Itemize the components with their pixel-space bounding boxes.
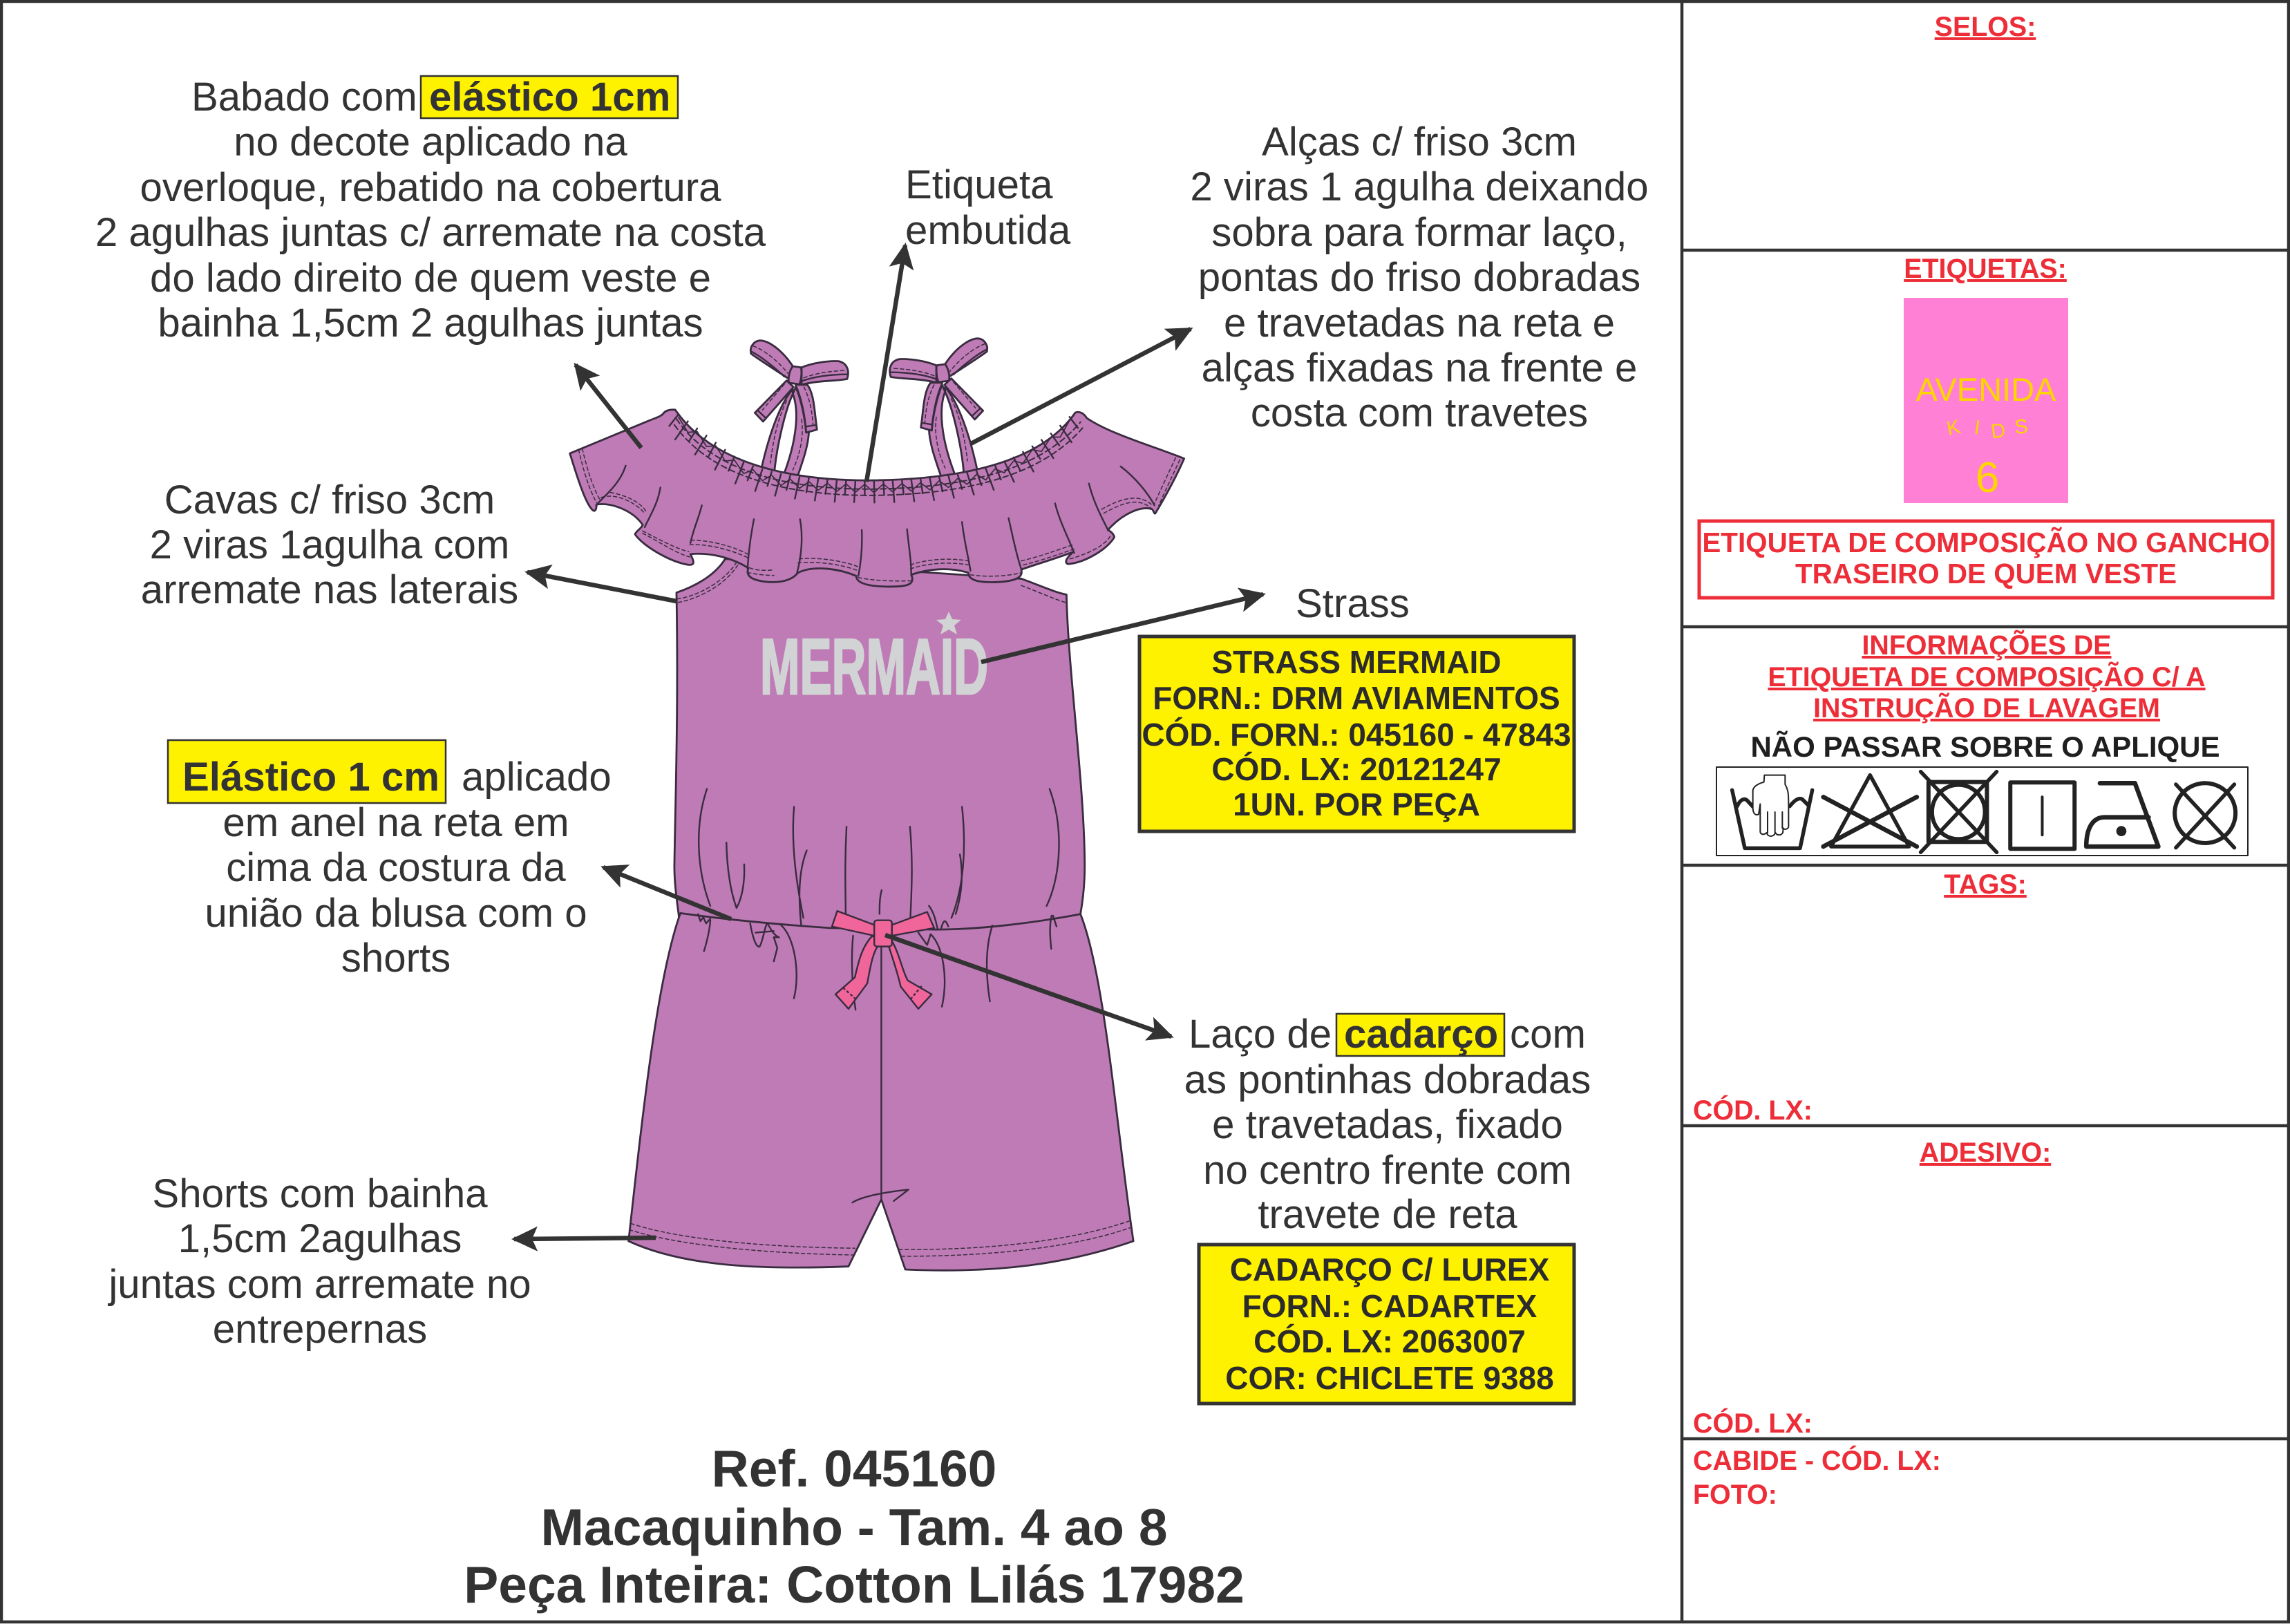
- brand label: [1904, 298, 2068, 503]
- arrow: laço: [885, 935, 1171, 1037]
- arrow: shorts: [514, 1238, 656, 1239]
- note: laço: Laço de: [1189, 1012, 1332, 1057]
- note: elástico: Elástico 1 cm: [182, 755, 439, 800]
- note: alças: pontas do friso dobradas: [1198, 255, 1640, 300]
- heading: tags: TAGS:: [1944, 869, 2027, 900]
- note: alças: alças fixadas na frente e: [1202, 346, 1637, 390]
- brand label: 6: [1976, 454, 1999, 502]
- hanger and photo: FOTO:: [1693, 1480, 1777, 1510]
- note: strass: Strass: [1296, 581, 1410, 626]
- title: Peça Inteira: Cotton Lilás 17982: [464, 1556, 1245, 1614]
- note: etiqueta embutida: Etiqueta: [905, 162, 1053, 207]
- note: babado: overloque, rebatido na cobertura: [140, 165, 721, 210]
- note: babado: no decote aplicado na: [234, 120, 627, 164]
- heading: etiquetas: ETIQUETAS:: [1904, 254, 2067, 284]
- note: laço: com: [1510, 1012, 1586, 1057]
- icon: no tumble dry: [1921, 772, 1996, 852]
- note: babado: do lado direito de quem veste e: [150, 256, 711, 301]
- warning: NÃO PASSAR SOBRE O APLIQUE: [1750, 730, 2220, 763]
- icon: iron low: [2086, 783, 2158, 847]
- note: babado: 2 agulhas juntas c/ arremate na costa: [95, 210, 766, 255]
- wash care icons: [1716, 767, 2248, 856]
- composition label note: ETIQUETA DE COMPOSIÇÃO NO GANCHO: [1702, 527, 2270, 558]
- left strap bow: [750, 341, 848, 482]
- heading: selos: SELOS:: [1935, 12, 2036, 42]
- brand label: AVENIDA: [1916, 371, 2056, 408]
- note: shorts: [107, 1171, 531, 1352]
- note: shorts: entrepernas: [213, 1307, 427, 1352]
- arrow: etiqueta embutida: [867, 245, 905, 482]
- box: cadarço: COR: CHICLETE 9388: [1225, 1360, 1554, 1396]
- box: cadarço: [1199, 1245, 1574, 1404]
- brand label: I: [1973, 417, 1981, 439]
- note: cavas: Cavas c/ friso 3cm: [164, 478, 495, 522]
- title: Ref. 045160: [712, 1439, 996, 1498]
- hanger and photo: CABIDE - CÓD. LX:: [1693, 1446, 1941, 1476]
- box: strass mermaid: [1139, 636, 1574, 831]
- shorts: [629, 906, 1133, 1270]
- note: cavas: 2 viras 1agulha com: [150, 522, 509, 567]
- note: alças: 2 viras 1 agulha deixando: [1190, 164, 1649, 209]
- note: alças: [1190, 120, 1649, 435]
- heading: informações: INFORMAÇÕES DE: [1862, 630, 2112, 661]
- tag code: CÓD. LX:: [1693, 1095, 1813, 1126]
- title: [464, 1439, 1245, 1614]
- arrow: strass: [981, 594, 1263, 662]
- hanger and photo: [1693, 1446, 1941, 1510]
- box: strass mermaid: FORN.: DRM AVIAMENTOS: [1153, 680, 1560, 716]
- waist drawstring bow: [832, 911, 934, 1009]
- note: alças: costa com travetes: [1251, 390, 1588, 435]
- note: laço: travete de reta: [1258, 1192, 1517, 1237]
- composition label note: [1699, 521, 2273, 598]
- note: alças: Alças c/ friso 3cm: [1262, 120, 1577, 164]
- note: elástico: aplicado: [462, 755, 612, 800]
- note: babado: bainha 1,5cm 2 agulhas juntas: [158, 301, 703, 346]
- note: cavas: [141, 478, 518, 612]
- right strap bow: [890, 339, 987, 480]
- note: cavas: arremate nas laterais: [141, 567, 518, 612]
- note: babado: [95, 75, 766, 346]
- note: elástico: em anel na reta em: [223, 800, 569, 845]
- note: elástico: [168, 740, 612, 981]
- note: shorts: 1,5cm 2agulhas: [178, 1216, 462, 1261]
- note: alças: sobra para formar laço,: [1211, 210, 1627, 255]
- box: strass mermaid: 1UN. POR PEÇA: [1233, 786, 1480, 822]
- note: laço: cadarço: [1344, 1012, 1498, 1057]
- arrow: alças: [971, 329, 1191, 444]
- note: elástico: cima da costura da: [226, 845, 566, 890]
- note: laço: e travetadas, fixado: [1212, 1102, 1563, 1147]
- box: cadarço: FORN.: CADARTEX: [1242, 1288, 1537, 1324]
- note: babado: Babado com: [191, 75, 417, 120]
- note: babado: elástico 1cm: [429, 75, 670, 120]
- arrow: elástico: [603, 867, 731, 919]
- ruffle neckline with elastic gathers: [570, 410, 1184, 587]
- heading: informações: INSTRUÇÃO DE LAVAGEM: [1813, 693, 2160, 724]
- left ruffle and armhole stitching: [578, 449, 774, 603]
- print: MERMAID with star: [760, 612, 988, 711]
- box: strass mermaid: CÓD. LX: 20121247: [1211, 751, 1502, 787]
- heading: informações: ETIQUETA DE COMPOSIÇÃO C/ A: [1768, 662, 2206, 692]
- icon: hand wash: [1732, 775, 1813, 848]
- heading: adesivo: ADESIVO:: [1920, 1137, 2051, 1168]
- box: strass mermaid: STRASS MERMAID: [1211, 644, 1502, 680]
- icon: line dry: [2010, 782, 2074, 849]
- note: laço: no centro frente com: [1203, 1148, 1572, 1193]
- note: etiqueta embutida: embutida: [905, 208, 1071, 253]
- brand label: S: [2014, 415, 2029, 439]
- garment illustration: romper: [570, 339, 1184, 1270]
- arrow: cavas: [527, 572, 676, 601]
- note: alças: e travetadas na reta e: [1224, 301, 1615, 346]
- composition label note: TRASEIRO DE QUEM VESTE: [1795, 558, 2177, 589]
- icon: no dry clean: [2175, 783, 2235, 848]
- title: Macaquinho - Tam. 4 ao 8: [540, 1498, 1168, 1556]
- print: MERMAID with star: MERMAID: [760, 623, 988, 711]
- icon: no bleach: [1824, 775, 1917, 847]
- brand label: K: [1944, 415, 1963, 440]
- box: cadarço: CÓD. LX: 2063007: [1253, 1323, 1526, 1359]
- heading: informações: [1768, 630, 2206, 724]
- brand label: D: [1989, 419, 2007, 443]
- box: cadarço: CADARÇO C/ LUREX: [1230, 1252, 1550, 1287]
- box: strass mermaid: CÓD. FORN.: 045160 - 47843: [1142, 717, 1571, 753]
- note: etiqueta embutida: [905, 162, 1071, 253]
- adhesive code: CÓD. LX:: [1693, 1408, 1813, 1439]
- note: laço: as pontinhas dobradas: [1184, 1057, 1591, 1102]
- arrow: babado: [576, 365, 641, 448]
- note: elástico: shorts: [341, 936, 451, 981]
- note: shorts: Shorts com bainha: [152, 1171, 488, 1216]
- bodice: [674, 559, 1085, 950]
- note: elástico: união da blusa com o: [205, 891, 587, 936]
- note: shorts: juntas com arremate no: [107, 1262, 531, 1307]
- note: laço: [1184, 1012, 1591, 1237]
